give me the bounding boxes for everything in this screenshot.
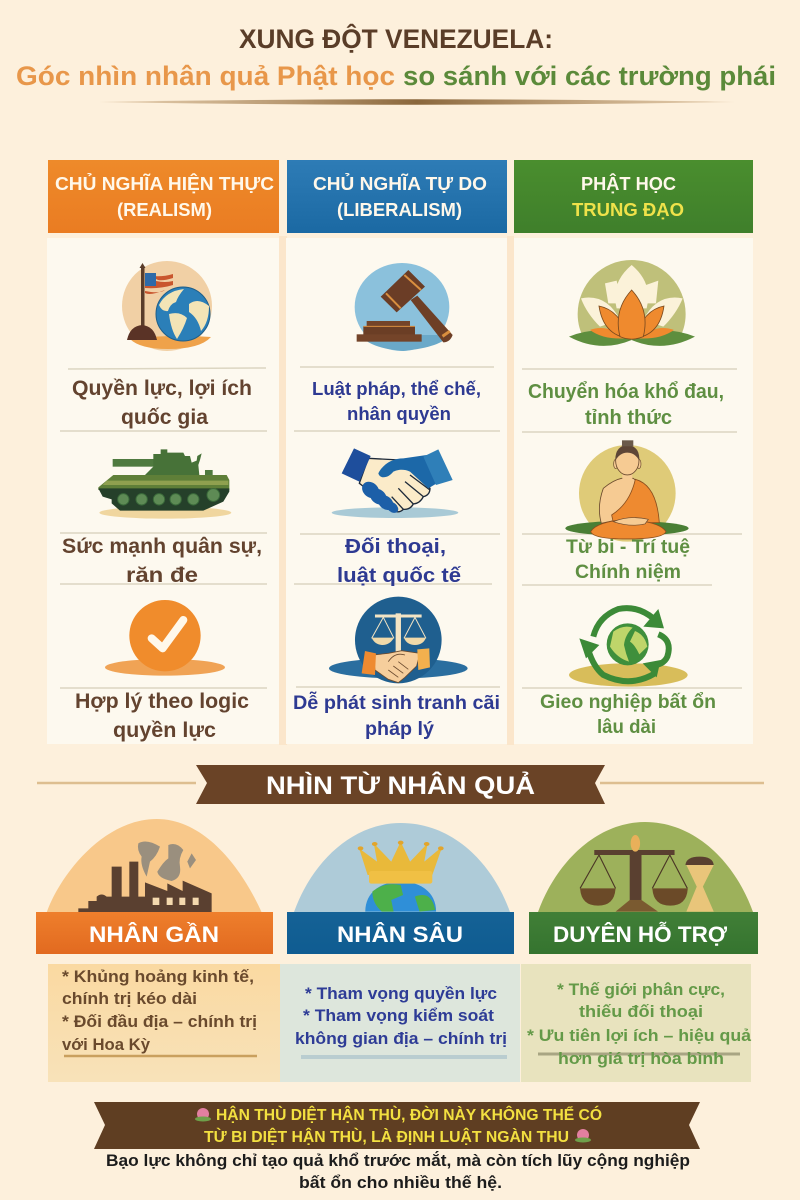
text: unstable karma: Gieo nghiệp bất ổn [540,692,716,713]
card: supporting conditions text: thiếu đối thoại [579,1002,703,1021]
text: law and human rights [312,379,481,424]
card: supporting conditions text: * Ưu tiên lợi ích – hiệu quả [527,1026,752,1045]
text: transforming suffering: Chuyển hóa khổ đau, [528,381,724,403]
closing text [106,1151,690,1192]
text: compassion and wisdom [566,537,690,583]
card: deep cause text: không gian địa – chính trị [295,1029,507,1048]
card: near cause text: với Hoa Kỳ [62,1035,151,1054]
text: logical by power: quyền lực [113,718,216,742]
text: unstable karma: lâu dài [597,717,656,738]
text: dialogue and international law: luật quốc tế [337,565,462,587]
text: power and national interest [72,376,252,429]
panel: supporting conditions [521,822,758,1082]
text: unstable karma [540,692,716,738]
icon: crown over globe dome [294,823,510,912]
icon: scales and handshake [329,597,468,683]
card: near cause text: * Đối đầu địa – chính trị [62,1012,257,1031]
section banner: causes: NHÌN TỪ NHÂN QUẢ [266,770,535,800]
header: realism: (REALISM) [117,200,212,220]
header: buddhism: TRUNG ĐẠO [572,200,684,220]
text: legal disputes: Dễ phát sinh tranh cãi [293,692,500,714]
panel: liberalism column [286,160,507,744]
icon: lotus [569,260,695,346]
text: compassion and wisdom: Chính niệm [575,562,681,583]
panel: near cause [36,819,280,1082]
closing text: Bạo lực không chỉ tạo quả khổ trước mắt, mà còn tích lũy cộng nghiệp [106,1151,690,1170]
text: law and human rights: Luật pháp, thể chế, [312,379,481,399]
header: realism [48,160,279,233]
text: logical by power: Hợp lý theo logic [75,689,249,713]
band: NHÂN SÂU [287,912,514,954]
header: realism: CHỦ NGHĨA HIỆN THỰC [55,173,274,194]
icon: small lotus left [195,1108,211,1122]
text: transforming suffering: tỉnh thức [585,407,672,429]
icon: small lotus right [575,1129,591,1142]
band: NHÂN SÂU: NHÂN SÂU [337,922,463,947]
text: military deterrence [62,534,262,587]
title [16,23,776,105]
icon: handshake [332,448,458,518]
icon: tank [98,449,231,519]
text: legal disputes [293,692,500,740]
header: liberalism: CHỦ NGHĨA TỰ DO [313,173,487,194]
text: legal disputes: pháp lý [365,719,434,740]
ribbon: closing quote [94,1102,700,1149]
text: military deterrence: răn đe [126,563,198,587]
panel: buddhist column [514,160,753,744]
card: near cause text [48,964,280,1082]
title: so sánh với các trường phái [403,61,776,91]
card: near cause text: chính trị kéo dài [62,989,197,1008]
icon: check mark [105,600,225,676]
icon: recycling earth [569,608,688,687]
band: DUYÊN HỖ TRỢ: DUYÊN HỖ TRỢ [553,921,727,947]
card: near cause text: * Khủng hoảng kinh tế, [62,967,254,986]
icon: factory dome [47,819,262,912]
card: supporting conditions text [521,964,752,1082]
column strip between panels [279,236,287,745]
ribbon: closing quote: HẬN THÙ DIỆT HẬN THÙ, ĐỜI NÀY KHÔNG THỂ CÓ [216,1105,602,1124]
text: military deterrence: Sức mạnh quân sự, [62,534,262,558]
text: law and human rights: nhân quyền [347,404,451,424]
text: logical by power [75,689,249,742]
divider lines [60,368,267,688]
card: supporting conditions text: hơn giá trị hòa bình [558,1049,724,1068]
ribbon: closing quote: TỪ BI DIỆT HẬN THÙ, LÀ ĐỊNH LUẬT NGÀN THU [204,1127,569,1146]
card: deep cause text: * Tham vọng kiểm soát [303,1006,494,1025]
text: transforming suffering [528,381,724,429]
divider lines [522,369,742,688]
text: dialogue and international law: Đối thoại, [345,536,446,558]
title: XUNG ĐỘT VENEZUELA: [239,23,553,54]
card: deep cause text [280,964,520,1082]
divider lines [294,367,500,687]
text: dialogue and international law [337,536,462,587]
header: liberalism: (LIBERALISM) [337,200,462,220]
header: liberalism [287,160,507,233]
panel: realism column [47,160,279,744]
band: NHÂN GẦN: NHÂN GẦN [89,922,219,947]
icon: gavel [355,263,453,351]
icon: scale and hourglass dome [538,822,753,912]
panel: deep cause [280,823,520,1082]
header: buddhism: PHẬT HỌC [581,173,676,194]
section banner: causes [37,765,764,804]
text: power and national interest: Quyền lực, lợi ích [72,376,252,400]
title: Góc nhìn nhân quả Phật học [16,61,395,91]
text: power and national interest: quốc gia [121,405,209,429]
header: buddhism [514,160,753,233]
band: NHÂN GẦN [36,912,273,954]
icon: meditating buddha [565,440,689,542]
text: compassion and wisdom: Từ bi - Trí tuệ [566,537,690,558]
card: deep cause text: * Tham vọng quyền lực [305,984,497,1003]
icon: flag and globe [122,261,212,351]
card: supporting conditions text: * Thế giới phân cực, [557,980,725,999]
band: DUYÊN HỖ TRỢ [529,912,758,954]
closing text: bất ổn cho nhiều thế hệ. [299,1174,502,1192]
